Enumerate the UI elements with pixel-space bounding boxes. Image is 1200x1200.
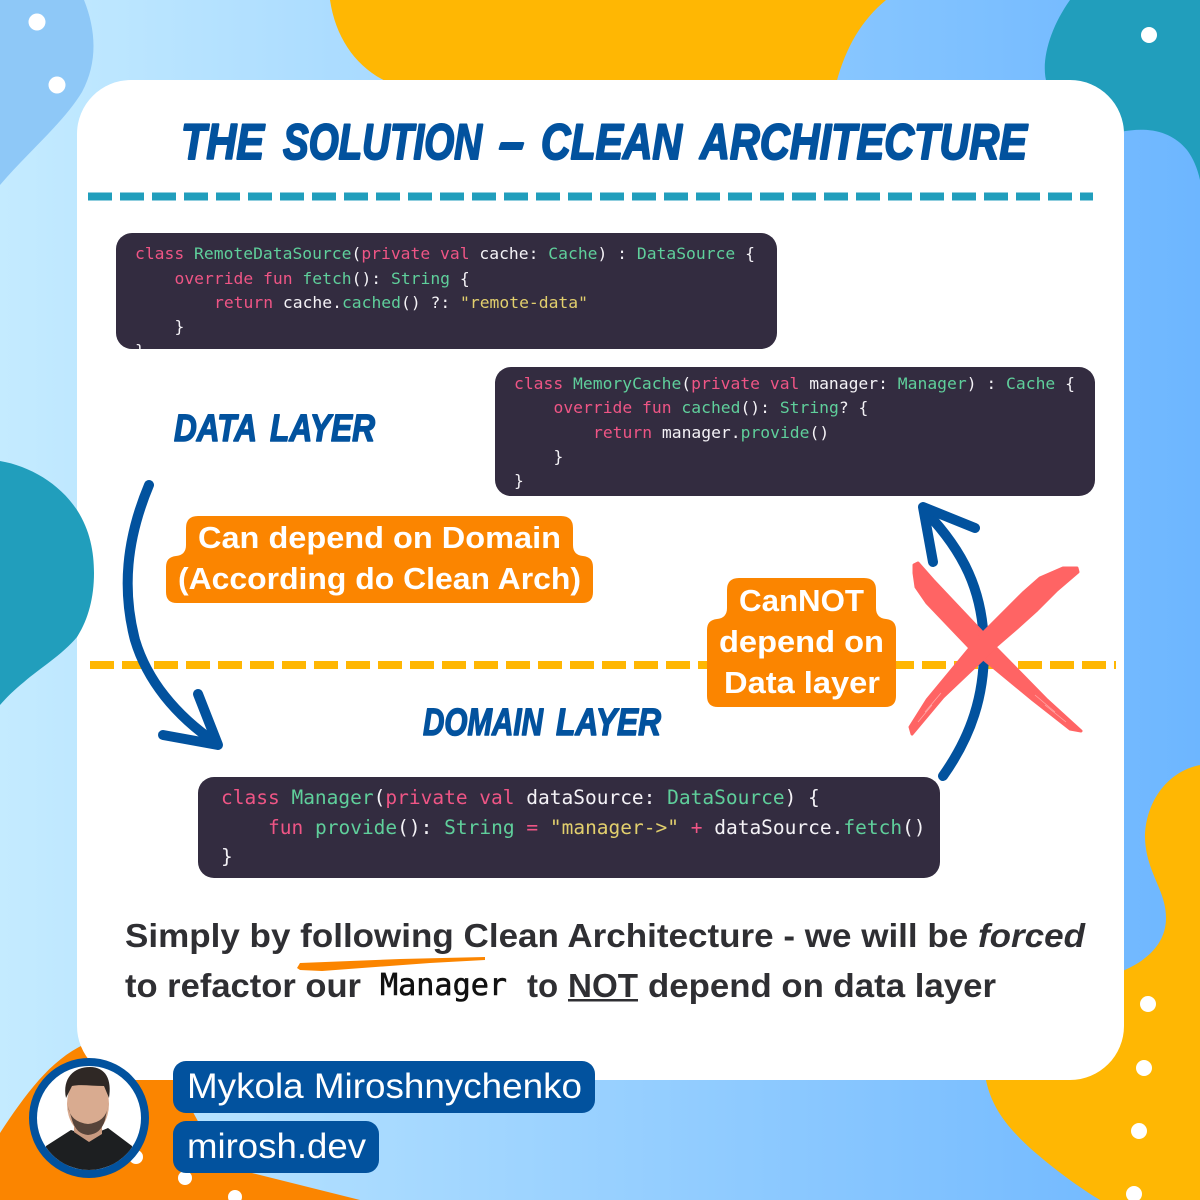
text block: conclusion: depend on data layer bbox=[648, 967, 996, 1004]
arrow: data to domain bbox=[128, 485, 218, 745]
icon: red brush cross bbox=[910, 563, 1081, 734]
author website badge: mirosh.dev bbox=[187, 1127, 367, 1166]
title: ARCHITECTURE bbox=[698, 114, 1028, 170]
title: CLEAN bbox=[541, 114, 683, 170]
code block: Manager: class Manager(private val dataSource: DataSource) { bbox=[221, 786, 820, 809]
code block: RemoteDataSource: } bbox=[135, 341, 145, 360]
text block: conclusion: to refactor our bbox=[125, 967, 361, 1004]
heading: data layer: LAYER bbox=[270, 408, 375, 450]
label: cannot depend on data layer: CanNOT bbox=[739, 583, 864, 618]
code block: MemoryCache: } bbox=[554, 447, 563, 466]
heading: domain layer bbox=[423, 702, 661, 744]
teal blob overlapping card edge bbox=[0, 461, 94, 705]
panel: white card bbox=[77, 80, 1124, 1080]
heading: data layer: DATA bbox=[174, 408, 257, 450]
code block: MemoryCache: return manager.provide() bbox=[593, 423, 829, 442]
code block: RemoteDataSource: return cache.cached() ?: "remote-data" bbox=[214, 293, 588, 312]
label: can depend on domain bbox=[166, 516, 593, 603]
title bbox=[181, 114, 1028, 170]
code block: MemoryCache: class MemoryCache(private val manager: Manager) : Cache { bbox=[514, 374, 1075, 393]
label: cannot depend on data layer bbox=[707, 578, 896, 707]
arrow: domain to data (forbidden) bbox=[923, 507, 984, 776]
code block: RemoteDataSource: override fun fetch(): String { bbox=[174, 269, 470, 288]
code block: MemoryCache bbox=[495, 367, 1095, 496]
title: SOLUTION bbox=[283, 114, 483, 170]
code block: Manager: } bbox=[221, 845, 233, 868]
title: THE bbox=[181, 114, 265, 170]
code block: Manager bbox=[198, 777, 940, 878]
author name badge bbox=[173, 1061, 595, 1113]
code block: Manager: fun provide(): String = "manager->" + dataSource.fetch() bbox=[268, 816, 926, 839]
heading: domain layer: LAYER bbox=[556, 702, 661, 744]
text block: conclusion: to bbox=[527, 967, 558, 1004]
code block: RemoteDataSource: class RemoteDataSource(private val cache: Cache) : DataSource { bbox=[135, 244, 755, 263]
label: can depend on domain: Can depend on Domain bbox=[198, 520, 561, 555]
code block: MemoryCache: } bbox=[514, 471, 524, 490]
label: can depend on domain: (According do Clean Arch) bbox=[178, 561, 581, 596]
label: cannot depend on data layer: Data layer bbox=[724, 665, 880, 700]
code block: MemoryCache: override fun cached(): String? { bbox=[554, 398, 868, 417]
heading: data layer bbox=[174, 408, 375, 450]
label: cannot depend on data layer: depend on bbox=[719, 624, 884, 659]
text block: conclusion bbox=[125, 917, 1086, 1004]
title: - bbox=[498, 114, 525, 170]
icon: orange brush underline bbox=[297, 957, 485, 971]
code block: RemoteDataSource bbox=[116, 233, 777, 360]
author website badge bbox=[173, 1121, 379, 1173]
text block: conclusion: NOT bbox=[568, 967, 638, 1004]
heading: domain layer: DOMAIN bbox=[423, 702, 544, 744]
author photo bbox=[33, 1062, 145, 1175]
text block: conclusion: Simply by following Clean Architecture - we will be forced bbox=[125, 917, 1086, 954]
text block: conclusion: Manager bbox=[380, 968, 507, 1003]
code block: RemoteDataSource: } bbox=[174, 317, 184, 336]
author name badge: Mykola Miroshnychenko bbox=[187, 1067, 582, 1106]
